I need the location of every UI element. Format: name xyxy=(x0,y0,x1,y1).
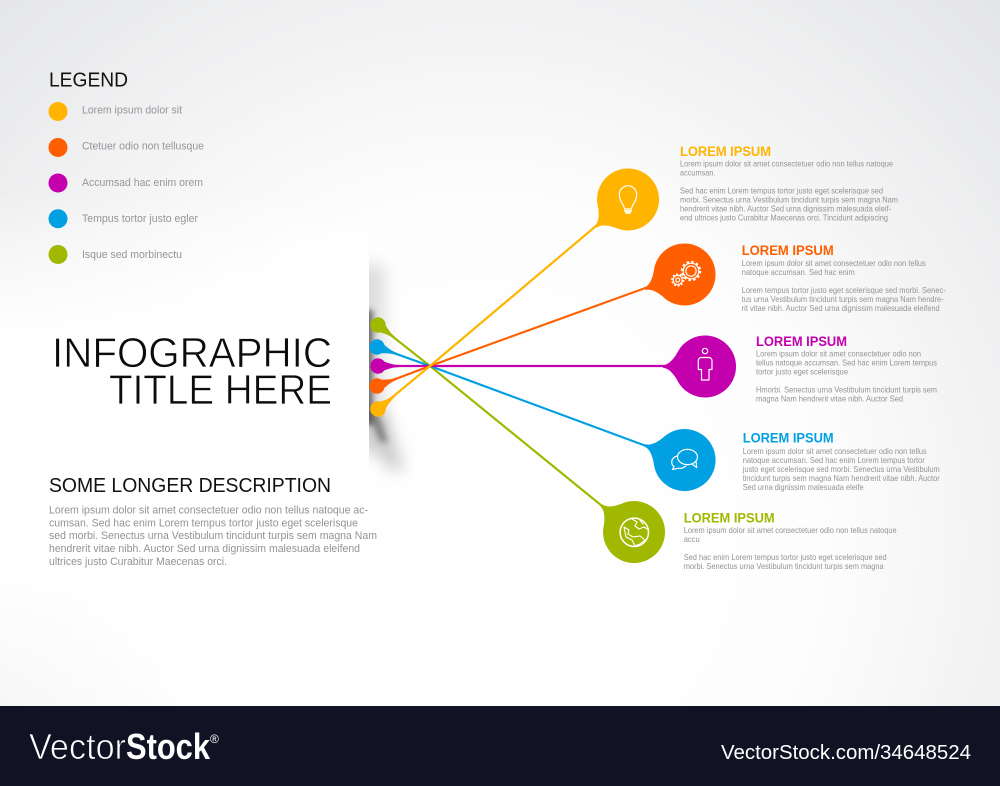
text block: orange: LOREM IPSUM xyxy=(742,243,834,258)
legend item: magenta: Accumsad hac enim orem xyxy=(82,177,203,189)
description text: sed morbi. Senectus urna Vestibulum tincidunt turpis sem magna Nam xyxy=(49,530,377,542)
text block: magenta: LOREM IPSUM xyxy=(756,334,847,349)
icon: speech bubbles xyxy=(672,449,698,470)
connector: magenta xyxy=(370,358,705,374)
legend heading: LEGEND xyxy=(49,70,128,92)
text block: magenta: Hmorbi. Senectus urna Vestibulum tincidunt turpis sem xyxy=(756,385,937,395)
footer logo xyxy=(29,726,219,767)
pin: blue speech bubbles xyxy=(634,416,724,500)
legend item: orange: Ctetuer odio non tellusque xyxy=(82,140,204,152)
pin: orange gears xyxy=(634,235,724,318)
footer logo: Stock xyxy=(126,726,211,767)
connector: blue xyxy=(367,337,684,460)
connector: yellow xyxy=(367,199,628,420)
text block: yellow: LOREM IPSUM xyxy=(680,144,771,159)
footer image id: VectorStock.com/34648524 xyxy=(721,742,971,764)
legend item: magenta xyxy=(48,174,203,192)
description text xyxy=(49,504,377,568)
text block: magenta: Lorem ipsum dolor sit amet consectetuer odio non xyxy=(756,349,921,359)
icon: globe xyxy=(620,518,648,546)
pin: yellow bulb xyxy=(576,156,672,250)
text block: blue: natoque accumsan. Sed hac enim Lorem tempus tortor xyxy=(743,455,925,465)
text block: green: Sed hac enim Lorem tempus tortor justo eget scelerisque sed xyxy=(684,552,887,562)
legend item: yellow xyxy=(48,102,182,121)
connector: orange xyxy=(367,274,684,396)
text block: orange xyxy=(742,243,946,313)
text block: yellow: morbi. Senectus urna Vestibulum tincidunt turpis sem magna Nam xyxy=(680,195,898,205)
text block: blue xyxy=(742,431,940,492)
description text: cumsan. Sed hac enim Lorem tempus tortor justo eget scelerisque xyxy=(49,518,358,530)
text block: orange: natoque accumsan. Sed hac enim xyxy=(742,267,855,277)
text block: orange: Lorem tempus tortor justo eget scelerisque sed morbi. Senec- xyxy=(742,285,946,295)
title xyxy=(52,329,332,413)
text block: blue: tincidunt turpis sem magna Nam hendrerit vitae nibh. Auctor xyxy=(743,473,940,483)
legend item: green: Isque sed morbinectu xyxy=(82,249,182,261)
text block: magenta: tellus natoque accumsan. Sed hac enim Lorem tempus xyxy=(756,358,937,368)
text block: blue: justo eget scelerisque sed morbi. Senectus urna Vestibulum xyxy=(742,464,940,474)
text block: orange: tus urna Vestibulum tincidunt turpis sem magna Nam hendre- xyxy=(742,294,944,304)
text block: yellow: Sed hac enim Lorem tempus tortor justo eget scelerisque sed xyxy=(680,186,883,196)
icon: person xyxy=(698,348,712,380)
legend item: green xyxy=(48,245,182,264)
icon: light bulb xyxy=(619,186,637,213)
text block: blue: Sed urna dignissim malesuada eleife xyxy=(743,482,864,492)
panel: white left sheet xyxy=(0,190,369,706)
legend item: yellow: Lorem ipsum dolor sit xyxy=(82,104,182,116)
fold shadow xyxy=(369,260,408,476)
text block: green: morbi. Senectus urna Vestibulum tincidunt turpis sem magna xyxy=(684,561,884,571)
description heading: SOME LONGER DESCRIPTION xyxy=(49,475,331,497)
footer bar xyxy=(0,706,1000,786)
text block: green xyxy=(684,510,897,571)
pin: magenta person xyxy=(663,336,736,398)
text block: yellow xyxy=(680,144,898,223)
text block: magenta: tortor justo eget scelerisque xyxy=(756,367,848,377)
title: TITLE HERE xyxy=(109,366,332,413)
panel: legend xyxy=(48,70,204,264)
legend item: blue: Tempus tortor justo egler xyxy=(82,213,198,225)
description text: hendrerit vitae nibh. Auctor Sed urna dignissim malesuada eleifend xyxy=(49,543,360,555)
title: INFOGRAPHIC xyxy=(52,329,332,376)
text block: magenta xyxy=(756,334,937,404)
text block: yellow: accumsan. xyxy=(680,168,716,178)
description text: Lorem ipsum dolor sit amet consectetuer odio non tellus natoque ac- xyxy=(49,504,368,516)
text block: green: LOREM IPSUM xyxy=(684,510,775,525)
footer logo: Vector xyxy=(29,726,126,767)
text block: orange: rit vitae nibh. Auctor Sed urna dignissim malesuada eleifend xyxy=(742,303,940,313)
text block: green: Lorem ipsum dolor sit amet consectetuer odio non tellus natoque xyxy=(684,525,897,535)
text block: blue: LOREM IPSUM xyxy=(743,431,834,446)
icon: gears xyxy=(672,262,700,286)
text block: green: accu xyxy=(684,534,700,544)
pin: green globe xyxy=(582,481,678,576)
legend item: blue xyxy=(48,209,198,228)
text block: yellow: Lorem ipsum dolor sit amet consectetuer odio non tellus natoque xyxy=(680,159,893,169)
text block: yellow: end ultrices justo Curabitur Maecenas orci. Tincidunt adipiscing xyxy=(680,213,888,223)
description text: ultrices justo Curabitur Maecenas orci. xyxy=(49,556,227,568)
text block: magenta: magna Nam hendrerit vitae nibh. Auctor Sed xyxy=(756,394,903,404)
connector: green xyxy=(367,314,634,532)
text block: yellow: hendrerit vitae nibh. Auctor Sed urna dignissim malesuada eleif- xyxy=(680,204,891,214)
text block: orange: Lorem ipsum dolor sit amet consectetuer odio non tellus xyxy=(742,258,926,268)
footer logo: ® xyxy=(210,732,219,746)
text block: blue: Lorem ipsum dolor sit amet consectetuer odio non tellus xyxy=(743,446,927,456)
legend item: orange xyxy=(48,138,204,157)
